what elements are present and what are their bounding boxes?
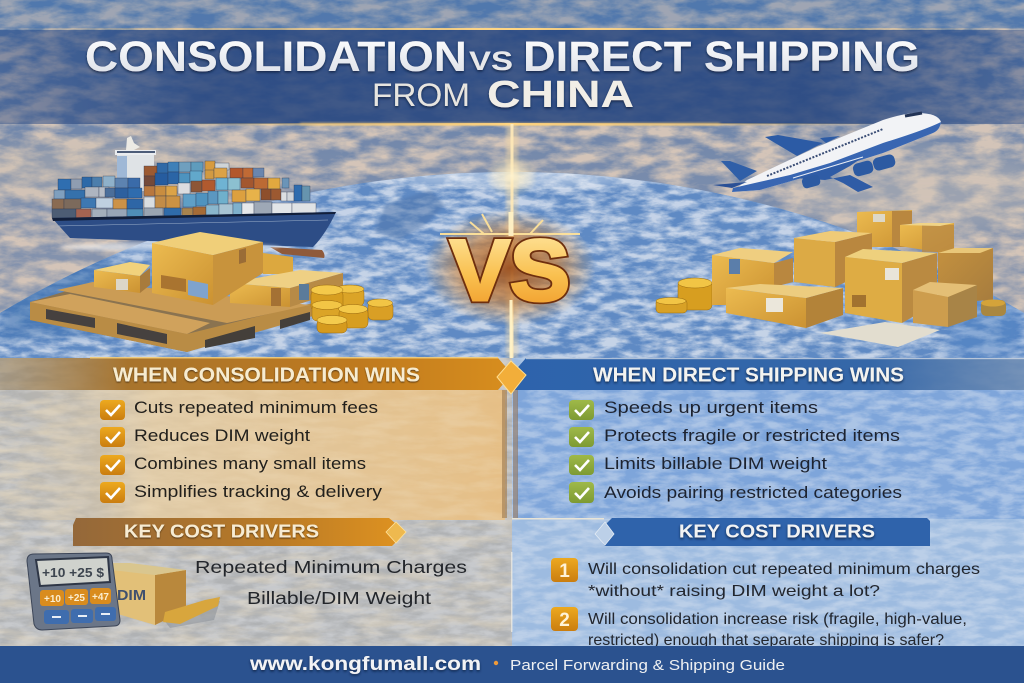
check item 3 xyxy=(569,454,827,475)
question 1 xyxy=(551,558,980,600)
heading: key cost drivers right: KEY COST DRIVERS xyxy=(679,522,875,542)
documents xyxy=(820,322,940,347)
title: DIRECT SHIPPING xyxy=(523,33,920,81)
plane windows xyxy=(767,129,883,176)
footer dot xyxy=(494,661,498,665)
questions xyxy=(551,558,980,649)
checklist: consolidation xyxy=(100,398,383,503)
plane vertical tail xyxy=(721,161,757,181)
small left box xyxy=(94,262,150,293)
check item 1 xyxy=(569,398,818,420)
plane near wing xyxy=(793,157,873,192)
text: cost drivers: Repeated Minimum Charges xyxy=(195,557,467,577)
check item 1: Speeds up urgent items xyxy=(604,398,818,417)
boxes, back to front xyxy=(712,210,1006,328)
illustration: pallet with boxes and coins xyxy=(30,232,393,352)
burst rays xyxy=(440,212,580,358)
plane far wing xyxy=(765,135,823,156)
central divider light xyxy=(486,124,538,358)
calculator: +25 xyxy=(68,593,85,604)
question 2: Will consolidation increase risk (fragile, high-value, xyxy=(588,611,967,628)
back box xyxy=(263,253,293,274)
left heading: WHEN CONSOLIDATION WINS xyxy=(113,364,420,386)
check item 1: Cuts repeated minimum fees xyxy=(134,398,378,417)
low right box xyxy=(230,270,343,307)
icon: calculator and DIM box xyxy=(27,553,220,630)
right heading: WHEN DIRECT SHIPPING WINS xyxy=(593,364,904,386)
right header ribbon xyxy=(512,358,1024,390)
title xyxy=(85,33,920,116)
stacked coins xyxy=(311,285,393,333)
heading: key cost drivers left xyxy=(73,518,406,546)
title: CHINA xyxy=(487,74,634,116)
calculator: +10 xyxy=(44,594,61,605)
wooden pallet xyxy=(30,282,313,352)
check item 2 xyxy=(569,426,900,447)
box left large xyxy=(712,255,774,305)
panel body left xyxy=(0,390,505,520)
check item 1 xyxy=(100,398,378,420)
calculator: +10 +25 $ xyxy=(42,565,105,580)
text: cost drivers: Billable/DIM Weight xyxy=(247,588,431,608)
checklist: direct shipping xyxy=(569,398,902,503)
box long front xyxy=(726,288,806,328)
question 2 xyxy=(551,607,967,649)
title: CONSOLIDATION xyxy=(85,33,467,81)
title: VS xyxy=(469,46,513,76)
large box xyxy=(152,232,263,305)
question 1: *without* raising DIM weight a lot? xyxy=(588,583,880,600)
title: FROM xyxy=(372,77,470,113)
illustration: stack of boxes and coins xyxy=(656,210,1006,347)
VS lettering: VS xyxy=(450,223,570,319)
DIM box: DIM xyxy=(117,587,146,604)
box big centre xyxy=(845,257,902,323)
ship containers xyxy=(52,161,316,218)
footer tagline: Parcel Forwarding & Shipping Guide xyxy=(510,657,785,674)
check item 3: Limits billable DIM weight xyxy=(604,454,827,473)
calculator xyxy=(27,553,120,630)
illustration: VS burst xyxy=(424,210,596,358)
footer bar xyxy=(0,646,1024,683)
ship hull xyxy=(52,212,336,247)
box small front xyxy=(913,290,948,327)
question 1: 1 xyxy=(559,561,570,582)
globe xyxy=(0,169,1024,360)
lower divider xyxy=(511,552,512,632)
lower background wash xyxy=(0,358,1024,646)
heading: key cost drivers right xyxy=(595,518,930,546)
check item 2: Protects fragile or restricted items xyxy=(604,426,900,445)
illustration: container ship xyxy=(52,136,336,258)
plane stabilizer xyxy=(713,182,747,188)
box upper centre xyxy=(794,238,835,287)
plane engines xyxy=(801,153,896,189)
VS lettering: VS xyxy=(450,223,570,319)
plane fuselage xyxy=(732,113,941,192)
centre diamond xyxy=(497,361,526,394)
panel: when consolidation wins xyxy=(0,357,512,520)
text: cost drivers xyxy=(195,557,467,608)
check item 3: Combines many small items xyxy=(134,454,366,473)
calculator: +47 xyxy=(92,592,109,603)
check item 4: Simplifies tracking & delivery xyxy=(134,482,383,501)
illustration: airplane xyxy=(713,113,941,192)
question 2: restricted) enough that separate shipping is safer? xyxy=(588,632,944,649)
check item 2: Reduces DIM weight xyxy=(134,426,310,445)
panel body right xyxy=(517,390,1024,519)
heading: key cost drivers left: KEY COST DRIVERS xyxy=(124,522,319,542)
ship superstructure xyxy=(115,136,156,191)
title band xyxy=(0,28,1024,126)
left header ribbon xyxy=(0,358,512,390)
panel: when direct shipping wins xyxy=(512,358,1024,520)
check item 4: Avoids pairing restricted categories xyxy=(604,483,902,502)
footer url: www.kongfumall.com xyxy=(249,654,481,675)
DIM box xyxy=(111,563,220,628)
question 2: 2 xyxy=(559,610,570,631)
right coins left stack xyxy=(656,278,712,313)
check item 4 xyxy=(100,482,383,503)
check item 2 xyxy=(100,426,310,447)
question 1: Will consolidation cut repeated minimum charges xyxy=(588,561,980,578)
